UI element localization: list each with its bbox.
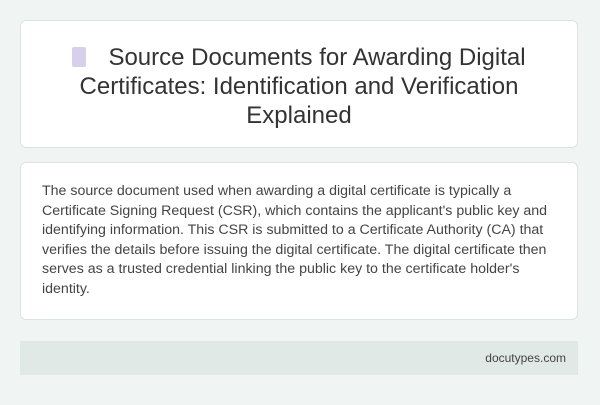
icon: document xyxy=(72,47,86,67)
footer bar xyxy=(20,341,578,375)
title: Source Documents for Awarding Digital Certificates: Identification and Verification Explained xyxy=(80,44,526,129)
panel: description xyxy=(20,162,578,320)
footer text: docutypes.com xyxy=(485,351,566,365)
panel: title card xyxy=(20,20,578,148)
text block: The source document used when awarding a digital certificate is typically a Certificate Signing Request (CSR), which contains the applicant's public key and identifying information. This CSR is submitted to a Certificate Authority (CA) that verifies the details before issuing the digital certificate. The digital certificate then serves as a trusted credential linking the public key to the certificate holder's identity. xyxy=(42,183,547,297)
